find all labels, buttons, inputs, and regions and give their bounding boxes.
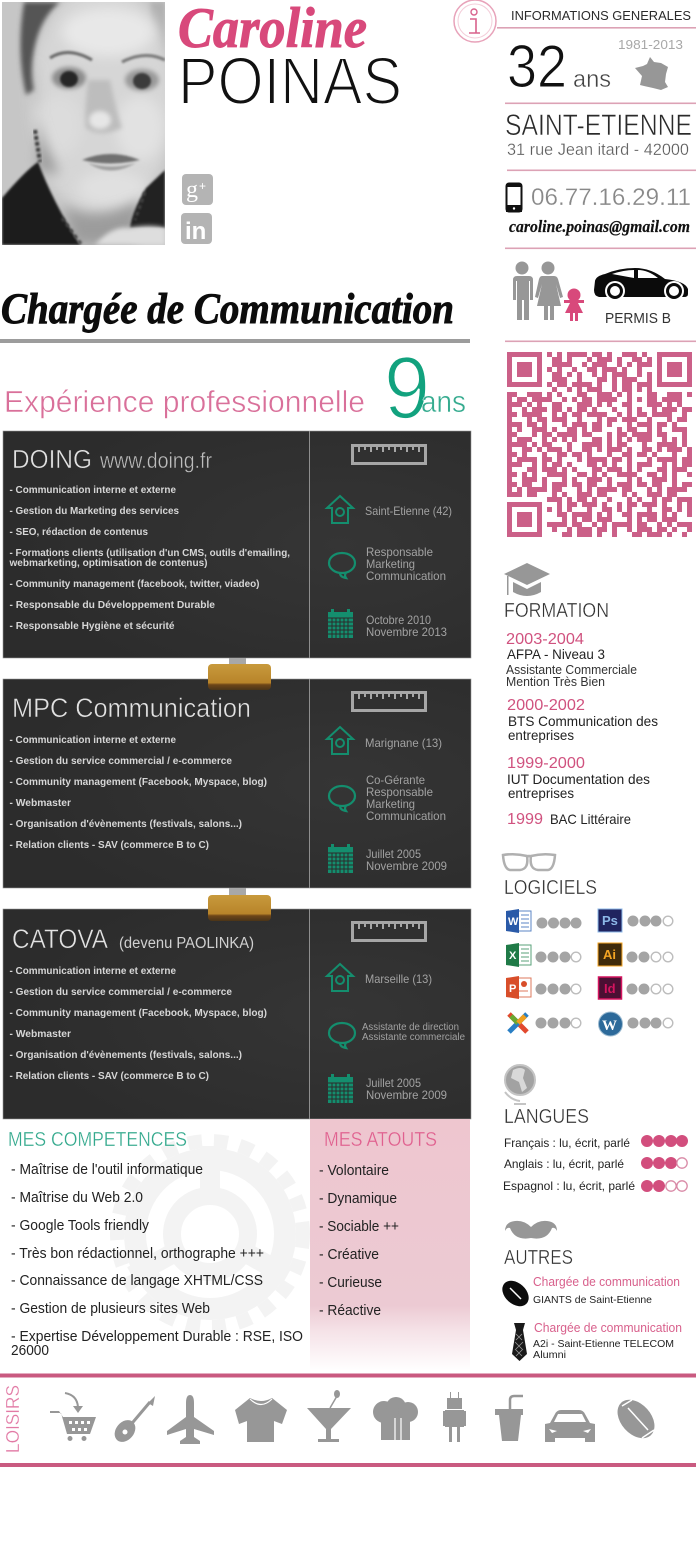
icon: france map: [635, 57, 668, 90]
task list: - Gestion du service commercial / e-commerce: [10, 756, 232, 767]
heading: formation: FORMATION: [504, 600, 609, 622]
task list: - Communication interne et externe: [10, 485, 176, 496]
software: indesign: Id: [604, 981, 616, 996]
task list: [10, 735, 267, 851]
job details: Communication: [366, 809, 446, 823]
age: ans: [573, 66, 611, 93]
education list: entreprises: [508, 727, 574, 743]
education list: Assistante Commerciale: [506, 663, 637, 677]
skills list: - Maîtrise de l'outil informatique: [11, 1162, 203, 1178]
age: 32: [507, 33, 567, 100]
other: a2i: [533, 1321, 682, 1361]
job details: [362, 972, 465, 1102]
other: giants: [533, 1275, 680, 1306]
icon: chef hat: [373, 1397, 418, 1440]
software: excel: [506, 943, 581, 967]
icon: home: [327, 964, 353, 991]
phone number: 06.77.16.29.11: [531, 184, 691, 211]
task list: - Responsable du Développement Durable: [10, 600, 215, 611]
last name: POINAS: [178, 44, 402, 119]
clip between boards 1 and 2: [208, 658, 271, 690]
heading: experience: Expérience professionnelle: [4, 384, 365, 419]
icon: cocktail: [307, 1390, 351, 1442]
heading: atouts: MES ATOUTS: [324, 1129, 437, 1151]
company name: [12, 924, 254, 954]
task list: - Gestion du service commercial / e-commerce: [10, 987, 232, 998]
education list: 2003-2004: [506, 631, 584, 648]
icon: robot: [443, 1392, 466, 1442]
icon: google plus: +: [199, 179, 206, 193]
heading: langues: LANGUES: [504, 1106, 589, 1128]
education list: 1999-2000: [507, 755, 585, 772]
education list: Mention Très Bien: [506, 675, 605, 689]
strengths list: - Sociable ++: [319, 1219, 399, 1235]
task list: - Responsable Hygiène et sécurité: [10, 621, 175, 632]
job details: Marseille (13): [365, 972, 432, 986]
icon: cup: [495, 1396, 523, 1441]
other: a2i: A2i - Saint-Etienne TELECOM: [533, 1338, 674, 1350]
job details: Co-Gérante: [366, 773, 425, 787]
icon: speech: [329, 786, 355, 811]
company name: DOING: [12, 444, 92, 474]
icon: rugby ball: [610, 1393, 662, 1445]
icon: linkedin: in: [185, 218, 206, 245]
icon: google plus: [182, 174, 213, 205]
job details: Marketing: [366, 797, 415, 811]
software: joomla: [509, 1014, 581, 1032]
job details: Marketing: [366, 557, 415, 571]
job details: [365, 504, 452, 639]
software: photoshop: Ps: [602, 913, 618, 928]
software: wordpress: W: [602, 1018, 617, 1034]
clip between boards 2 and 3: [208, 888, 271, 921]
icon: moustache: [505, 1221, 557, 1239]
QR code: [507, 352, 692, 537]
icon: gear watermark: [117, 1141, 303, 1327]
address: 31 rue Jean itard - 42000: [507, 141, 689, 159]
panel: CATOVA: [3, 909, 471, 1119]
panel: MPC: [3, 679, 471, 888]
software: wordpress: [598, 1012, 673, 1036]
job details: [365, 736, 447, 873]
loisirs label: LOISIRS: [3, 1385, 23, 1453]
software: indesign: [598, 977, 673, 999]
strengths list: - Curieuse: [319, 1275, 382, 1291]
task list: [9, 485, 290, 632]
heading: experience: [4, 338, 466, 437]
languages list: Espagnol : lu, écrit, parlé: [503, 1179, 635, 1193]
icon: speech: [329, 1023, 355, 1048]
skills list: - Gestion de plusieurs sites Web: [11, 1301, 210, 1317]
icon: home: [327, 727, 353, 754]
software: word: [506, 909, 582, 933]
icon: t-shirt: [235, 1398, 287, 1442]
icon: graduation cap: [504, 563, 550, 596]
software: word: W: [508, 916, 519, 928]
task list: - Relation clients - SAV (commerce B to C): [10, 1071, 209, 1082]
software: photoshop: [598, 909, 673, 932]
skills list: - Maîtrise du Web 2.0: [11, 1190, 143, 1206]
heading: logiciels: LOGICIELS: [504, 877, 597, 899]
strengths list: - Réactive: [319, 1303, 381, 1319]
icon: info badge: [454, 0, 496, 42]
task list: [10, 966, 267, 1082]
icon: guitar: [110, 1396, 155, 1446]
heading: competences: MES COMPETENCES: [8, 1129, 187, 1151]
heading: informations: INFORMATIONS GENERALES: [511, 8, 691, 23]
job details: Saint-Etienne (42): [365, 504, 452, 518]
education list: entreprises: [508, 785, 574, 801]
icon: phone: [506, 184, 522, 212]
icon: home: [327, 496, 353, 523]
photo portrait: [2, 0, 174, 245]
strengths list: - Volontaire: [319, 1163, 389, 1179]
permis label: PERMIS B: [605, 310, 671, 327]
job details: Octobre 2010: [366, 613, 431, 627]
job details: Responsable: [366, 785, 433, 799]
icon: globe: [505, 1065, 535, 1104]
task list: - SEO, rédaction de contenus: [10, 527, 148, 538]
panel: atouts background: [310, 1119, 470, 1371]
icon: speech: [329, 553, 355, 578]
heading: experience: ans: [421, 384, 466, 419]
task list: webmarketing, optimisation de contenus): [9, 558, 208, 569]
other: giants: Chargée de communication: [533, 1275, 680, 1289]
job details: Novembre 2009: [366, 1088, 447, 1102]
software: excel: X: [509, 950, 517, 962]
job details: Novembre 2009: [366, 859, 447, 873]
task list: - Community management (Facebook, Myspace, blog): [10, 1008, 267, 1019]
company name: (devenu PAOLINKA): [119, 935, 254, 952]
task list: - Organisation d'évènements (festivals, salons...): [10, 819, 242, 830]
icon: football: [497, 1276, 534, 1311]
strengths list: [319, 1163, 399, 1319]
skills list: - Connaissance de langage XHTML/CSS: [11, 1273, 263, 1289]
education list: BAC Littéraire: [550, 811, 631, 827]
other: a2i: Chargée de communication: [534, 1321, 682, 1335]
skills list: - Google Tools friendly: [11, 1218, 150, 1234]
icon: ruler: [352, 922, 426, 940]
job details: Juillet 2005: [366, 847, 421, 861]
panel: DOING: [3, 431, 471, 658]
icon: ruler: [352, 692, 426, 710]
icon: cart: [50, 1393, 96, 1441]
icon: glasses: [503, 854, 555, 870]
task list: - Formations clients (utilisation d'un CMS, outils d'emailing,: [10, 548, 290, 559]
education list: AFPA - Niveau 3: [507, 646, 605, 662]
company name: [12, 444, 212, 474]
icon: plane: [167, 1395, 214, 1444]
other: a2i: Alumni: [533, 1349, 566, 1361]
education list: [506, 631, 658, 828]
icon: calendar: [328, 609, 353, 638]
job details: Responsable: [366, 545, 433, 559]
skills list: - Expertise Développement Durable : RSE, ISO: [11, 1329, 303, 1345]
heading: experience: 9: [384, 338, 430, 437]
icon: google plus: g: [186, 177, 198, 203]
other: giants: GIANTS de Saint-Etienne: [533, 1294, 652, 1306]
task list: - Gestion du Marketing des services: [10, 506, 179, 517]
task list: - Webmaster: [10, 1029, 71, 1040]
software: powerpoint: [506, 976, 581, 999]
icon: car: [594, 268, 688, 301]
strengths list: - Dynamique: [319, 1191, 397, 1207]
job details: Assistante de direction: [362, 1022, 459, 1033]
job details: Novembre 2013: [366, 625, 447, 639]
icon: calendar: [328, 844, 353, 873]
birth and death years: 1981-2013: [618, 38, 683, 52]
skills list: 26000: [11, 1343, 49, 1359]
icon: ruler: [352, 446, 426, 464]
software: powerpoint: P: [509, 983, 516, 995]
education list: BTS Communication des: [508, 713, 658, 729]
languages list: Anglais : lu, écrit, parlé: [504, 1157, 624, 1171]
education list: 2000-2002: [507, 697, 585, 714]
languages list: Français : lu, écrit, parlé: [504, 1136, 630, 1150]
software: illustrator: Ai: [603, 947, 616, 962]
task list: - Webmaster: [10, 798, 71, 809]
job details: Assistante commerciale: [362, 1032, 465, 1043]
languages list: [503, 1135, 688, 1193]
task list: - Organisation d'évènements (festivals, salons...): [10, 1050, 242, 1061]
skills list: - Très bon rédactionnel, orthographe +++: [11, 1246, 264, 1262]
icon: linkedin: [181, 213, 212, 245]
software: illustrator: [598, 943, 673, 966]
company name: CATOVA: [12, 924, 108, 954]
loisirs bars: [0, 1374, 696, 1467]
company name: www.doing.fr: [99, 448, 212, 473]
job details: Marignane (13): [365, 736, 442, 750]
icon: calendar: [328, 1074, 353, 1103]
heading: autres: AUTRES: [504, 1247, 573, 1269]
section rules: [497, 27, 696, 342]
icon: tie: [512, 1323, 527, 1361]
title rule: [0, 339, 470, 343]
strengths list: - Créative: [319, 1247, 379, 1263]
age: [507, 33, 611, 100]
task list: - Relation clients - SAV (commerce B to C): [10, 840, 209, 851]
task list: - Community management (facebook, twitter, viadeo): [10, 579, 260, 590]
skills list: [11, 1162, 303, 1359]
icon: sports car: [545, 1410, 595, 1442]
task list: - Community management (Facebook, Myspace, blog): [10, 777, 267, 788]
education list: IUT Documentation des: [507, 771, 650, 787]
company name: MPC Communication: [12, 693, 251, 723]
task list: - Communication interne et externe: [10, 966, 176, 977]
task list: - Communication interne et externe: [10, 735, 176, 746]
job title: Chargée de Communication: [1, 286, 454, 333]
job details: Communication: [366, 569, 446, 583]
icon: family: [513, 262, 584, 321]
job details: Juillet 2005: [366, 1076, 421, 1090]
education list: 1999: [507, 811, 543, 828]
